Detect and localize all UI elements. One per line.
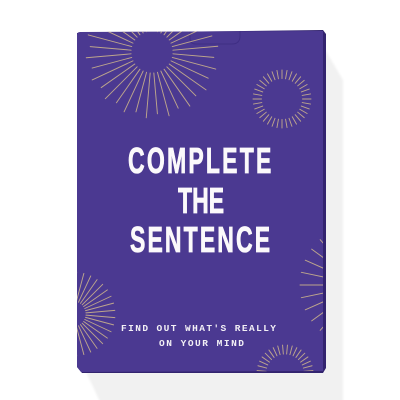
lid tab xyxy=(190,31,240,44)
sunburst: bottom edge xyxy=(257,345,313,371)
product box infographic xyxy=(77,30,342,400)
subtitle: ON YOUR MIND xyxy=(159,338,244,349)
box shadow xyxy=(86,48,343,400)
box edge xyxy=(77,30,326,373)
title: SENTENCE xyxy=(130,221,270,260)
sunburst: lower left xyxy=(74,272,115,356)
title xyxy=(128,142,271,260)
title: THE xyxy=(178,182,224,221)
sunburst: right edge xyxy=(300,239,323,331)
box front panel xyxy=(77,31,323,372)
sunburst: top left xyxy=(86,32,218,118)
sunburst: top right ring xyxy=(253,70,311,128)
title: COMPLETE xyxy=(128,142,271,181)
subtitle xyxy=(121,323,276,349)
subtitle: FIND OUT WHAT'S REALLY xyxy=(121,323,276,334)
